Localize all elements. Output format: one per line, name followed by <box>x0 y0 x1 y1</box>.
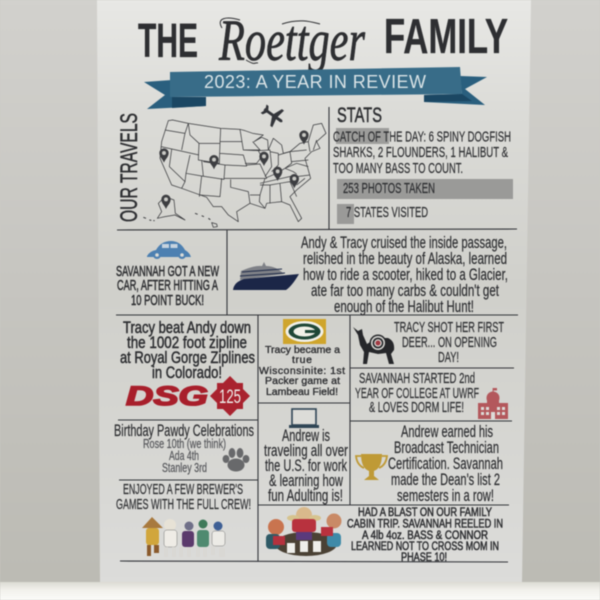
text: first deer: DAY! <box>438 350 459 366</box>
text: cabin trip <box>347 507 503 564</box>
logo: DSG 125 <box>126 376 250 416</box>
text: andrew work: the U.S. for work <box>265 457 347 475</box>
title <box>138 8 508 73</box>
text: packer game: Packer game at <box>265 375 340 387</box>
text: packer game: Tracy became a <box>265 344 340 356</box>
floor strip <box>0 582 600 600</box>
stat bar: photos taken <box>337 179 513 199</box>
text: savannah new car: CAR, AFTER HITTING A <box>117 278 218 294</box>
text: alaska cruise: Andy & Tracy cruised the inside passage, <box>301 234 507 252</box>
text: andrew work <box>264 427 348 505</box>
title: THE <box>138 15 198 68</box>
text: zipline <box>120 319 255 382</box>
icon: airplane <box>258 100 288 130</box>
banner <box>144 67 487 109</box>
text: packer game: Wisconsinite: 1st <box>259 365 345 377</box>
text: andrew work: traveling all over <box>264 442 348 460</box>
panel dividers <box>116 107 518 562</box>
title: Roettger <box>218 8 365 73</box>
text: andrew certification: Certification. Savannah <box>388 455 503 473</box>
text: andrew certification: Broadcast Technician <box>394 439 499 457</box>
text: alaska cruise: how to ride a scooter, hiked to a Glacier, <box>303 266 508 284</box>
text: savannah new car: 10 POINT BUCK! <box>131 293 204 309</box>
banner: 2023: A YEAR IN REVIEW <box>204 72 426 92</box>
text: cabin trip: HAD A BLAST ON OUR FAMILY <box>358 507 492 519</box>
text: cabin trip: A 4lb 4oz. BASS & CONNOR <box>362 530 488 542</box>
text: andrew work: fun Adulting is! <box>268 487 343 505</box>
text: college <box>355 371 479 416</box>
text: alaska cruise <box>301 234 508 316</box>
paper card <box>97 0 531 582</box>
text: alaska cruise: relished in the beauty of Alaska, learned <box>303 250 507 268</box>
logo: Packers <box>283 319 326 344</box>
stat: catch of the day <box>333 128 511 177</box>
text: zipline: Tracy beat Andy down <box>123 319 251 337</box>
stat: catch of the day: SHARKS, 2 FLOUNDERS, 1 HALIBUT & <box>333 145 508 161</box>
text: college: SAVANNAH STARTED 2nd <box>359 371 475 387</box>
heading: stats: STATS <box>337 104 382 127</box>
map: United States with visited state pins <box>143 120 326 227</box>
text: zipline: the 1002 foot zipline <box>127 334 247 352</box>
text: zipline: at Royal Gorge Ziplines <box>120 349 255 367</box>
text: andrew work: Andrew is <box>282 427 330 445</box>
logo: DSG 125: DSG <box>126 381 208 411</box>
title: FAMILY <box>384 10 508 64</box>
text: savannah new car: SAVANNAH GOT A NEW <box>116 264 219 280</box>
text: brewers games: ENJOYED A FEW BREWER'S <box>123 482 243 498</box>
stat bar: states visited <box>337 204 428 224</box>
text: packer game: Lambeau Field! <box>266 386 338 398</box>
text: zipline: in Colorado! <box>152 364 222 382</box>
text: savannah new car <box>116 264 219 309</box>
text: brewers games <box>116 482 251 513</box>
illustration: family playing cards <box>266 507 342 556</box>
stat: catch of the day: CATCH OF THE DAY: 6 SPINY DOGFISH <box>333 130 511 146</box>
stat: catch of the day: TOO MANY BASS TO COUNT. <box>333 161 463 177</box>
text: birthdays <box>114 422 254 475</box>
stat bar: photos taken: 253 PHOTOS TAKEN <box>343 181 435 197</box>
text: first deer: TRACY SHOT HER FIRST <box>394 320 504 336</box>
logo: DSG 125: 125 <box>219 387 241 408</box>
illustration: racing sausages <box>142 517 225 557</box>
text: andrew certification <box>388 423 503 505</box>
text: college: YEAR OF COLLEGE AT UWRF <box>355 386 479 402</box>
icon: paw print <box>223 448 249 472</box>
icon: blue car <box>147 241 191 259</box>
icon: deer with target <box>353 327 394 364</box>
stat bar: states visited: 7 STATES VISITED <box>346 205 428 221</box>
text: birthdays: Birthday Pawdy Celebrations <box>114 422 254 440</box>
text: andrew work: & learning how <box>269 472 343 490</box>
text: birthdays: Rose 10th (we think) <box>143 436 226 451</box>
icon: school building <box>478 388 508 419</box>
text: college: & LOVES DORM LIFE! <box>369 400 464 416</box>
text: first deer <box>394 320 504 366</box>
text: first deer: DEER... ON OPENING <box>402 335 497 351</box>
text: andrew certification: semesters in a row! <box>397 487 494 505</box>
text: alaska cruise: ate far too many carbs & couldn't get <box>311 282 499 300</box>
icon: trophy <box>356 454 387 480</box>
text: brewers games: GAMES WITH THE FULL CREW! <box>116 497 251 513</box>
icon: cruise ship <box>233 262 299 290</box>
heading: our travels: OUR TRAVELS <box>116 113 143 222</box>
text: andrew certification: made the Dean's list 2 <box>391 471 500 489</box>
text: packer game: true <box>292 354 312 366</box>
text: cabin trip: LEARNED NOT TO CROSS MOM IN <box>351 541 499 553</box>
text: birthdays: Stanley 3rd <box>162 460 207 475</box>
text: packer game <box>259 344 345 398</box>
text: cabin trip: CABIN TRIP. SAVANNAH REELED IN <box>347 518 503 530</box>
text: andrew certification: Andrew earned his <box>401 423 493 441</box>
text: birthdays: Ada 4th <box>169 448 199 463</box>
icon: laptop <box>289 409 319 428</box>
text: cabin trip: PHASE 10! <box>401 552 447 564</box>
text: alaska cruise: enough of the Halibut Hunt! <box>334 298 474 316</box>
